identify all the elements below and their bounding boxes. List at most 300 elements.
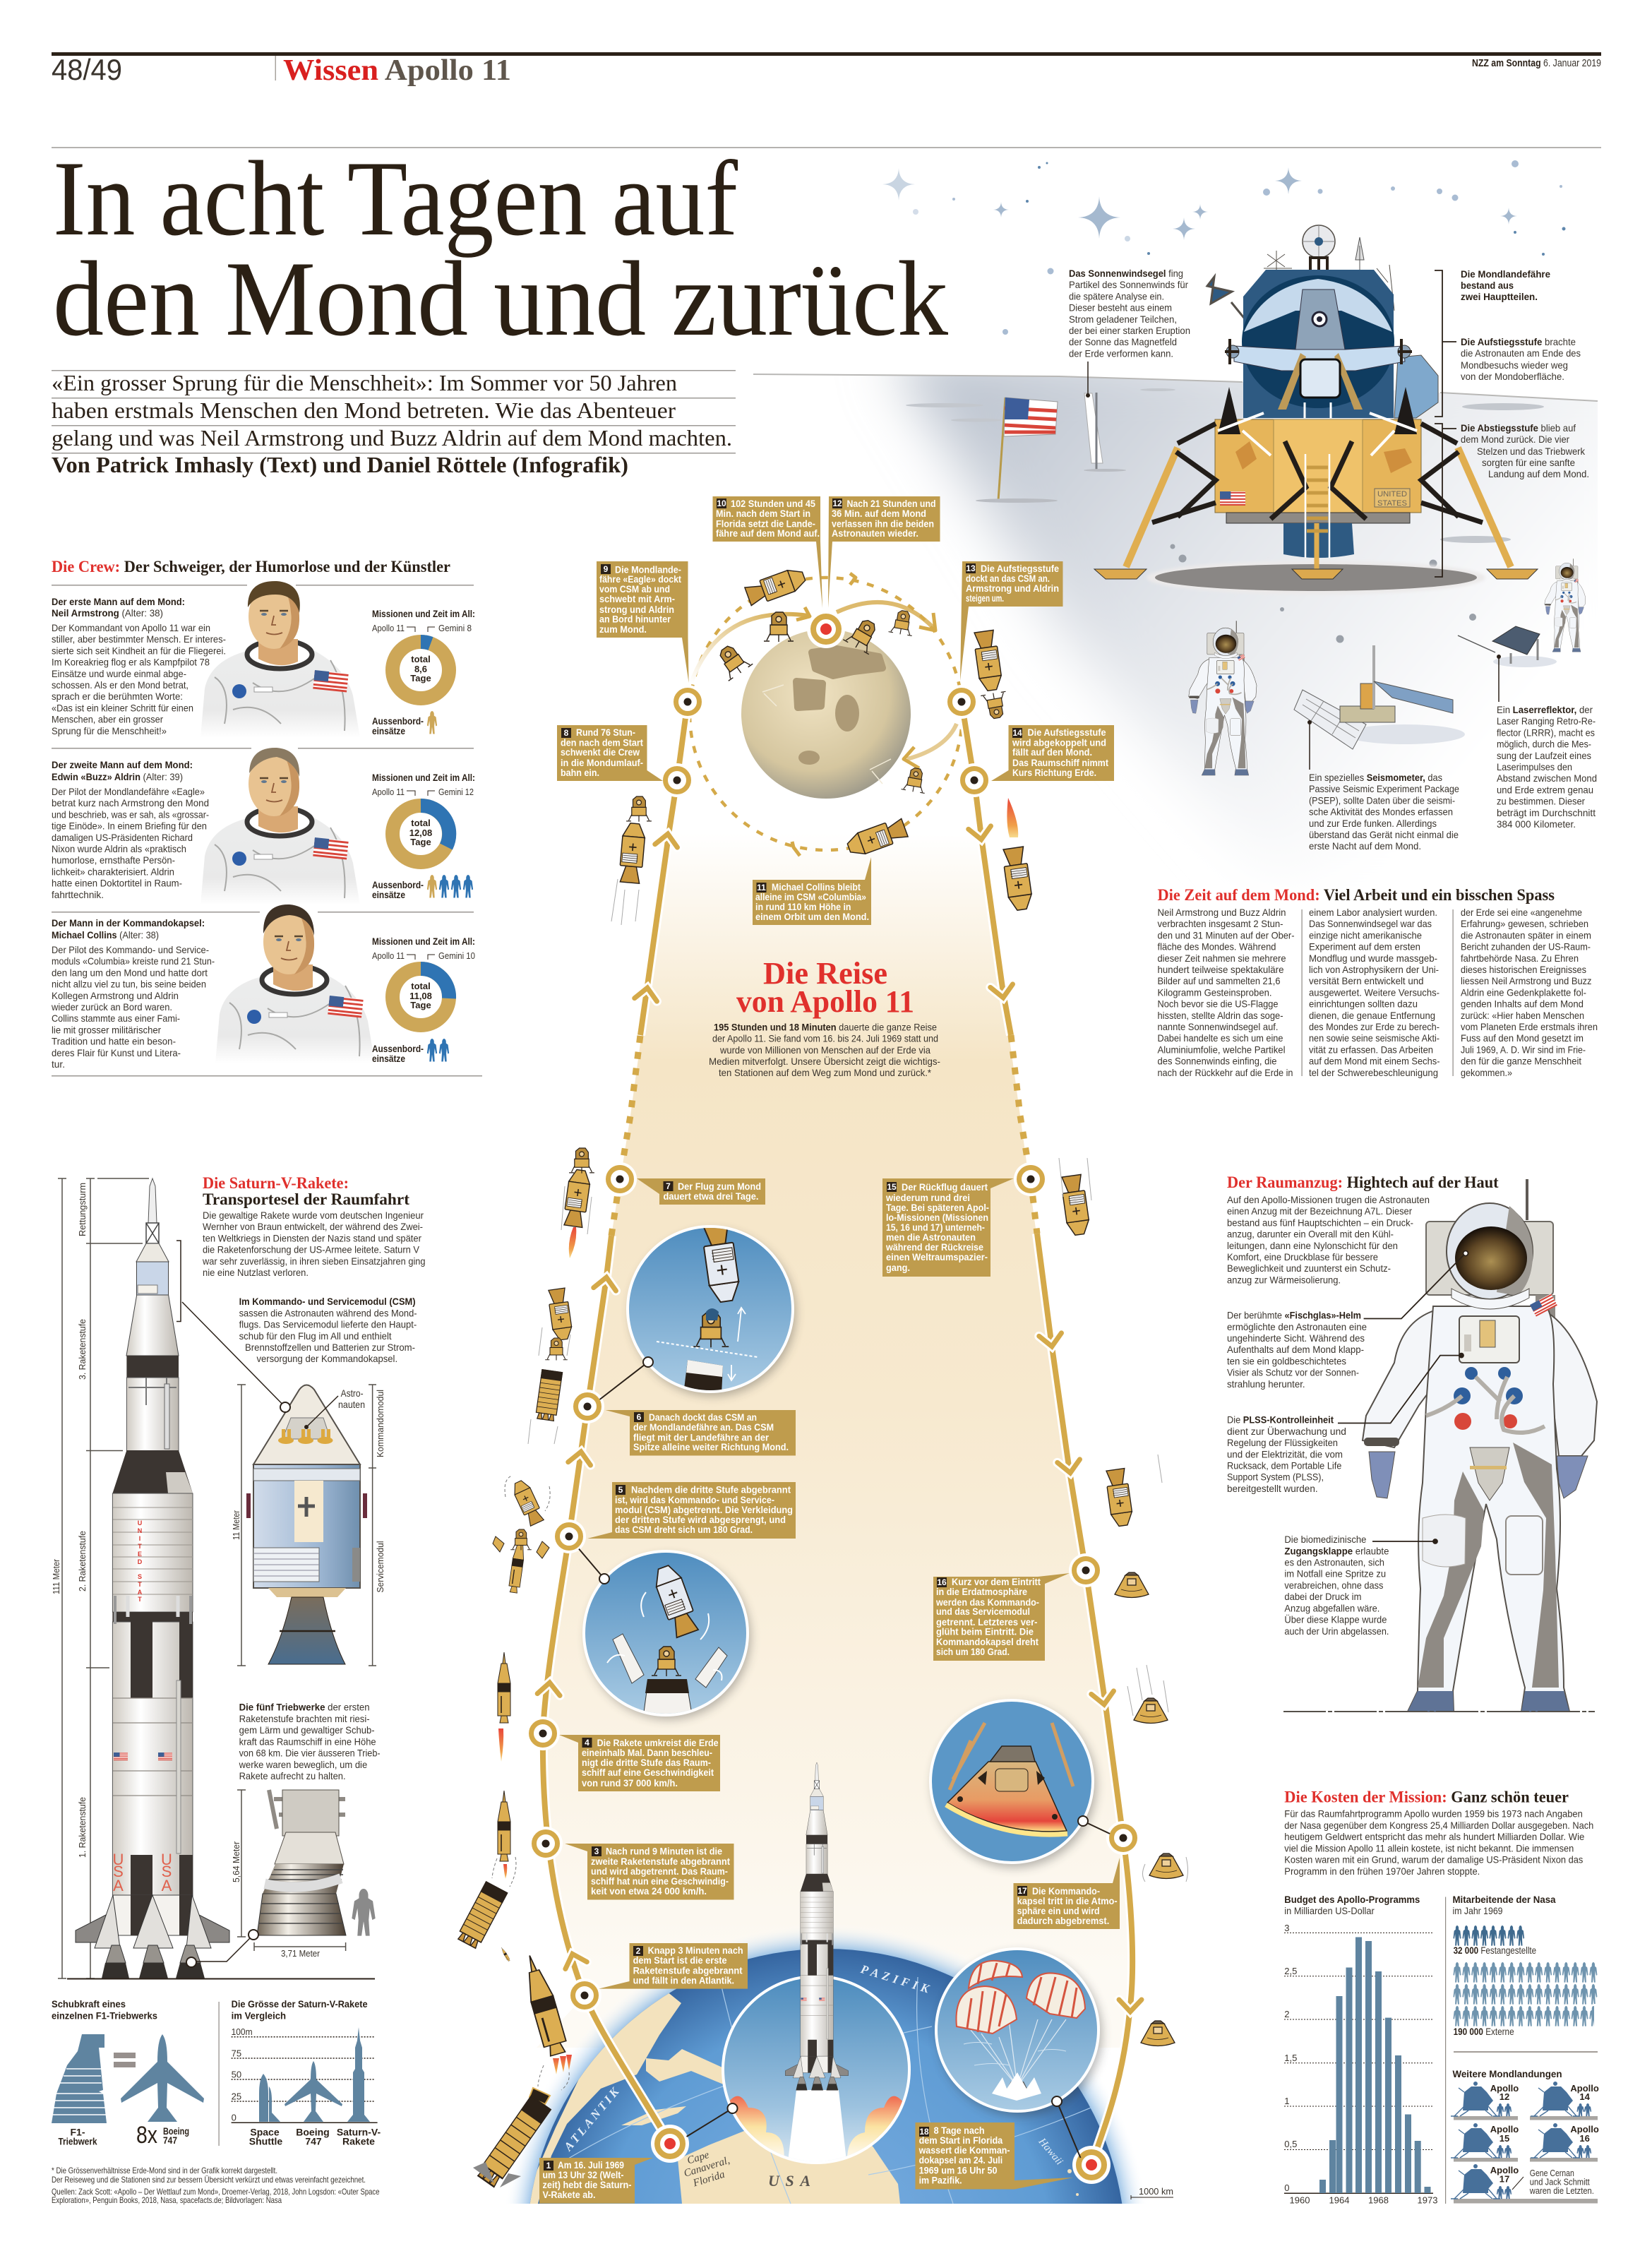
callout 15: einen Weltraumspazier-	[886, 1251, 988, 1262]
CSM labels and dimensions	[231, 1385, 385, 1666]
callout 6: der Mondlandefähre an. Das CSM	[633, 1421, 774, 1433]
text: laser reflector: und Erde extrem genau	[1497, 784, 1593, 795]
text: Collins: deres Flair für Kunst und Litera-	[52, 1047, 181, 1058]
bar chart: budget	[1284, 1894, 1437, 2206]
donut chart: Aldrin: Gemini 12	[438, 787, 474, 797]
text: Collins: lie mit grosser militärischer	[52, 1024, 161, 1035]
Saturn V rocket: D	[138, 1558, 143, 1565]
callout 5	[587, 1482, 796, 1539]
callout 5: das CSM dreht sich um 180 Grad.	[615, 1524, 753, 1535]
earth labels: USA	[768, 2172, 810, 2190]
text: solar wind sail: Partikel des Sonnenwinds für	[1069, 279, 1188, 290]
text: Collins: wieder zurück an Bord waren.	[51, 1001, 172, 1013]
size comparison chart: 0	[232, 2113, 237, 2122]
callout 8: in die Mondumlauf-	[561, 757, 643, 768]
panel: lunar surface scene	[753, 160, 1652, 876]
earth	[504, 1923, 1148, 2204]
moon rocks and craters	[906, 388, 1569, 643]
callout 12	[828, 496, 940, 608]
panel: space suit	[1227, 1174, 1597, 1712]
text: Armstrong: «Das ist ein kleiner Schritt für einen	[52, 702, 193, 713]
donut chart: Collins	[372, 936, 475, 1064]
callout 15: gang.	[886, 1262, 910, 1273]
callout 14: 14	[1012, 728, 1022, 738]
text column 3: dieses historischen Ereignisses	[1461, 964, 1586, 975]
callout 10: 102 Stunden und 45	[731, 498, 815, 509]
bar chart: budget: Budget des Apollo-Programms	[1284, 1894, 1420, 1905]
callout 1: zeit) hebt die Saturn-	[542, 2179, 632, 2190]
callout 15: 15	[887, 1182, 897, 1192]
callout 4: von rund 37 000 km/h.	[582, 1777, 678, 1789]
text: Aldrin: Nixon wurde Aldrin als «praktisch	[52, 843, 186, 854]
bar chart: budget: 3	[1284, 1923, 1290, 1933]
callout 3: 3	[594, 1846, 599, 1856]
text: Aldrin: fahrttechnik.	[52, 889, 104, 900]
rocket dimension lines	[58, 1178, 149, 1978]
callout 3: und wird abgetrennt. Das Raum-	[591, 1865, 728, 1877]
rocket labels: Rettungsturm	[77, 1183, 88, 1236]
portrait: Buzz Aldrin	[200, 748, 360, 905]
thrust comparison: Boeing	[163, 2125, 189, 2137]
text: cost intro	[1284, 1808, 1593, 1877]
text column 1: Noch bevor sie die US-Flagge	[1158, 998, 1279, 1010]
text: Saturn V intro: Wernher von Braun entwickelt, der während des Zwei-	[203, 1221, 423, 1232]
text: CSM: schub für den Flug im All und enthielt	[239, 1330, 392, 1342]
Saturn V rocket: U	[113, 1851, 124, 1868]
text column 1: nach der Rückkehr auf die Erde in	[1158, 1067, 1293, 1078]
thrust comparison: 747	[163, 2134, 177, 2146]
callout 15: während der Rückreise	[885, 1241, 983, 1253]
text: PLSS: Rucksack, dem Portable Life	[1227, 1460, 1342, 1471]
spacecraft on the outbound leg	[456, 1148, 594, 2188]
callout 10: Florida setzt die Lande-	[716, 518, 815, 530]
size comparison chart: im Vergleich	[232, 2010, 286, 2021]
bracket: two main parts	[1435, 270, 1456, 577]
callout 4: 4	[585, 1738, 589, 1748]
text: suit intro: Beweglichkeit und zuunterst ein Schutz-	[1227, 1262, 1391, 1274]
text: helmet: Visier als Schutz vor der Sonnen-	[1227, 1367, 1359, 1378]
further moon landings: und Jack Schmitt	[1530, 2177, 1590, 2187]
callout 1: Am 16. Juli 1969	[558, 2159, 624, 2171]
text column 3: fahrtbehörde Nasa. Zu Ehren	[1461, 953, 1579, 964]
text column 1: dieser Zeit nahmen sie mehrere	[1158, 953, 1286, 964]
flight path: outbound and return	[543, 573, 1132, 2165]
text: Aldrin: hatte einen Doktortitel in Raum-	[52, 877, 182, 888]
further moon landings: Apollo	[1490, 2124, 1519, 2134]
text: cost intro: Programm in den frühen 1970er Jahren stoppte.	[1284, 1865, 1480, 1877]
pictogram: NASA staff: im Jahr 1969	[1453, 1905, 1503, 1916]
callout 16: Kurz vor dem Eintritt	[952, 1576, 1041, 1587]
leader lines	[1338, 1251, 1468, 1544]
intro text: haben erstmals Menschen den Mond betreten. Wie das Abenteuer	[52, 398, 676, 423]
donut chart: Aldrin	[372, 772, 475, 900]
text: Armstrong: Sprung für die Menschheit!»	[52, 725, 167, 736]
rocket labels: 111 Meter	[51, 1558, 61, 1594]
text: Saturn V intro: nie eine Nutzlast verloren.	[203, 1267, 309, 1278]
scene 5: CSM turnaround	[584, 1551, 750, 1723]
callout 8: den nach dem Start	[561, 737, 643, 748]
callout 2: und fällt in den Atlantik.	[633, 1974, 734, 1986]
donut chart: Armstrong	[372, 608, 475, 736]
text column 3: der Erde sei eine «angenehme	[1461, 907, 1582, 918]
text: Collins: Kollegen Armstrong und Aldrin	[52, 990, 179, 1001]
scene 18: splashdown	[936, 1949, 1102, 2116]
thrust comparison: Schubkraft eines	[52, 1998, 126, 2010]
text column 1: Bilder auf und sammelten 21,6	[1158, 975, 1281, 986]
Saturn V rocket: A	[138, 1589, 143, 1596]
text: CSM: Im Kommando- und Servicemodul (CSM)	[239, 1296, 416, 1307]
Saturn V rocket: I	[139, 1535, 140, 1542]
moon orbit: dashed circle	[690, 578, 962, 850]
callout 4: schiff auf eine Geschwindigkeit	[582, 1767, 714, 1778]
callout 11: Michael Collins bleibt	[772, 881, 861, 892]
callout 7: 7	[666, 1181, 671, 1191]
donut chart: Collins: Gemini 10	[438, 950, 475, 961]
callout 17: Die Kommando-	[1032, 1885, 1100, 1897]
text: Armstrong: Neil Armstrong (Alter: 38)	[52, 607, 163, 619]
callout 18: dokapsel am 24. Juli	[919, 2154, 1002, 2166]
text: suit intro: bestand aus fünf Hauptschichten – ein Druck-	[1227, 1217, 1413, 1229]
callout 15: Der Rückflug dauert	[902, 1181, 988, 1193]
donut chart: Aldrin: einsätze	[372, 889, 405, 900]
callout 16: 16	[937, 1577, 947, 1587]
text: lunar module parts: zwei Hauptteilen.	[1461, 291, 1538, 302]
callout 16: sich um 180 Grad.	[936, 1646, 1010, 1657]
size comparison chart: 100m	[232, 2026, 253, 2037]
donut chart: Aldrin: total	[411, 818, 431, 828]
text: lunar module parts: Landung auf dem Mond.	[1488, 468, 1589, 479]
bar chart: budget: in Milliarden US-Dollar	[1284, 1905, 1375, 1916]
text: Saturn V intro: Die gewaltige Rakete wurde vom deutschen Ingenieur	[203, 1210, 424, 1221]
CSM labels and dimensions: Kommandomodul	[375, 1390, 385, 1457]
CSM labels and dimensions: Astro-	[341, 1387, 364, 1399]
text: F1 engines: Raketenstufe brachten mit riesi-	[239, 1713, 370, 1724]
text: seismometer: sche Aktivität des Mondes erfassen	[1309, 806, 1453, 818]
journey background	[537, 830, 1130, 2048]
spacecraft on the return leg	[1059, 1158, 1187, 2046]
text: cost intro: Für das Raumfahrtprogramm Apollo wurden 1959 bis 1973 nach Angaben	[1284, 1808, 1583, 1820]
text column 3: den für die ganze Menschheit	[1461, 1055, 1581, 1066]
journey title: Die Reise	[763, 956, 887, 991]
pictogram: NASA staff: Mitarbeitende der Nasa	[1453, 1894, 1556, 1905]
CSM labels and dimensions: Servicemodul	[375, 1541, 385, 1593]
callout 9: Die Mondlande-	[615, 563, 681, 575]
donut chart: Collins: 11,08	[409, 991, 432, 1001]
text: laser reflector: Laser Ranging Retro-Re-	[1497, 715, 1596, 727]
Saturn V rocket: U	[161, 1851, 172, 1868]
callout 3: Nach rund 9 Minuten ist die	[606, 1846, 722, 1857]
earth labels: Florida	[691, 2169, 726, 2190]
intro text	[52, 370, 736, 477]
journey intro: wurde von Millionen von Menschen auf der Erde via	[719, 1044, 930, 1056]
text column 2: Experiment auf dem ersten	[1309, 941, 1420, 952]
text: Aldrin	[52, 759, 209, 900]
thrust comparison: Triebwerk	[58, 2135, 97, 2146]
connector pins	[579, 1357, 1110, 2158]
callout 4	[559, 1735, 720, 1791]
callout 14	[991, 725, 1114, 781]
text: Armstrong: sprach er die berühmten Worte:	[52, 691, 183, 702]
text: Collins: den lang um den Mond und hatte dort	[52, 967, 208, 979]
callout 11: in rund 110 km Höhe in	[755, 901, 851, 912]
donut chart: Aldrin: 12,08	[409, 828, 432, 838]
pictogram: NASA staff: 190 000 Externe	[1454, 2026, 1514, 2037]
text column 2: einrichtungen sollten dazu	[1309, 998, 1418, 1010]
panel: crew	[51, 558, 482, 1076]
text: F1 engines: kraft das Raumschiff in eine Höhe	[239, 1736, 376, 1747]
thrust comparison: einzelnen F1-Triebwerks	[52, 2010, 157, 2021]
text: Collins: Der Mann in der Kommandokapsel:	[52, 917, 205, 929]
lunar module	[1094, 225, 1538, 595]
footnote and sources: Der Reiseweg und die Stationen sind zur bessern Übersicht verkürzt und etwas vereinfacht gezeichnet.	[52, 2175, 366, 2185]
text: Armstrong: Der Kommandant von Apollo 11 war ein	[52, 622, 210, 633]
size comparison chart: Saturn-V-	[337, 2127, 381, 2138]
callout 6	[606, 1410, 796, 1456]
text: PLSS: und der Elektrizität, die vom	[1227, 1449, 1343, 1460]
text column 2: dienen, die genaue Entfernung	[1309, 1010, 1435, 1021]
size comparison chart: 75	[232, 2048, 241, 2059]
text: helmet: Aufenthalts auf dem Mond klapp-	[1227, 1344, 1364, 1355]
text column 2: einzige nicht amerikanische	[1309, 929, 1422, 941]
text: biomedical access flap: dabei der Druck im	[1284, 1591, 1361, 1602]
space suit illustration	[1363, 1179, 1597, 1712]
text: lunar module parts: Mondbesuchs wieder weg	[1461, 359, 1568, 371]
text column 1: den und 31 Minuten auf der Ober-	[1158, 929, 1295, 941]
CSM cutaway	[249, 1385, 365, 1664]
text column 1: hissten, stellte Aldrin das soge-	[1158, 1010, 1283, 1021]
text: Collins: moduls «Columbia» kreiste rund 21 Stun-	[52, 955, 215, 967]
direction chevrons	[537, 826, 1142, 2012]
text: Armstrong: schossen. Als er den Mond betrat,	[52, 679, 188, 691]
Saturn V rocket: T	[138, 1581, 142, 1588]
text column 2: lich von Astrophysikern der Uni-	[1309, 964, 1439, 975]
text: suit intro: leitungen, dann eine Nylonschicht für den	[1227, 1240, 1398, 1251]
size comparison chart: Die Grösse der Saturn-V-Rakete	[232, 1998, 368, 2010]
text: Armstrong: Der erste Mann auf dem Mond:	[52, 596, 185, 607]
Saturn V rocket	[76, 1178, 229, 1978]
callout 14: wird abgekoppelt und	[1012, 737, 1106, 748]
text column 3: Juli 1969, A. D. Wir sind im Frie-	[1461, 1044, 1586, 1055]
text: Collins: Tradition und hatte ein beson-	[52, 1035, 176, 1046]
text: suit intro: Komfort, eine Druckblase für bessere	[1227, 1251, 1378, 1262]
text: laser reflector: möglich, durch die Mes-	[1497, 739, 1591, 750]
F1 engine detail	[67, 1790, 376, 1980]
text column 1: Neil Armstrong und Buzz Aldrin	[1158, 907, 1286, 918]
text: solar wind sail: Dieser besteht aus einem	[1069, 302, 1172, 314]
text: cost intro: heutigem Geldwert entspricht das mehr als hundert Milliarden Dollar. Wie	[1284, 1831, 1584, 1842]
earth labels	[561, 1962, 1065, 2191]
text: biomedical access flap: verabreichen, ohne dass	[1284, 1580, 1383, 1591]
donut chart: Collins: Aussenbord-	[372, 1043, 424, 1054]
callout 2: Knapp 3 Minuten nach	[648, 1945, 743, 1956]
callout 5: modul (CSM) abgetrennt. Die Verkleidung	[615, 1504, 793, 1515]
callout 6: 6	[637, 1412, 642, 1422]
callout 8: 8	[564, 728, 569, 738]
text column 3: Aldrin eine Gedenkplakette fol-	[1461, 987, 1586, 998]
text: lunar module parts: Die Mondlandefähre	[1461, 268, 1550, 280]
Saturn V rocket: N	[138, 1527, 142, 1534]
donut chart: Aldrin: Missionen und Zeit im All:	[372, 772, 475, 783]
bar chart: budget: 1960	[1290, 2195, 1310, 2206]
text: biomedical access flap: auch der Urin abgelassen.	[1284, 1625, 1389, 1637]
text: PLSS: bereitgestellt wurden.	[1227, 1483, 1318, 1494]
Saturn V rocket: S	[162, 1863, 172, 1880]
stars	[882, 160, 1566, 335]
callout 8: schwenkt die Crew	[561, 746, 640, 758]
bar chart: budget: 1968	[1368, 2195, 1389, 2206]
callout 7: dauert etwa drei Tage.	[664, 1190, 758, 1202]
text: solar wind sail	[1069, 268, 1190, 359]
donut chart: Collins: Missionen und Zeit im All:	[372, 936, 475, 947]
callout 1: V-Rakete ab.	[542, 2189, 596, 2200]
callout 6: Spitze alleine weiter Richtung Mond.	[633, 1441, 789, 1452]
heading: Saturn V: Transportesel der Raumfahrt	[203, 1190, 409, 1208]
text: solar wind sail: Das Sonnenwindsegel fing	[1069, 268, 1183, 279]
rocket labels: 2. Raketenstufe	[77, 1531, 88, 1592]
footnote and sources: * Die Grössenverhältnisse Erde-Mond sind in der Grafik korrekt dargestellt.	[52, 2166, 277, 2175]
intro text: «Ein grosser Sprung für die Menschheit»: Im Sommer vor 50 Jahren	[52, 370, 677, 395]
title	[53, 139, 948, 358]
text column 3: gekommen.»	[1461, 1067, 1512, 1078]
text: seismometer: (PSEP), sollte Daten über die seismi-	[1309, 795, 1455, 806]
page header	[52, 52, 1601, 148]
text column 2: Mondflug und wurde massgeb-	[1309, 953, 1437, 964]
suit ground line	[1283, 1711, 1595, 1712]
text: helmet: strahlung herunter.	[1227, 1378, 1305, 1390]
astronaut front	[1189, 621, 1257, 775]
donut chart: Collins: einsätze	[372, 1053, 405, 1064]
heading: Zeit auf dem Mond: Die Zeit auf dem Mond: Viel Arbeit und ein bisschen Spass	[1158, 886, 1555, 904]
text: Armstrong	[52, 596, 226, 736]
callout 1	[539, 2158, 653, 2204]
text: Aldrin: und beschrieb, was er sah, als «grossar-	[52, 809, 209, 820]
callout 18: wassert die Komman-	[918, 2144, 1010, 2156]
callout 17: 17	[1017, 1886, 1027, 1896]
donut chart: Armstrong: Aussenbord-	[372, 715, 424, 727]
callout 13: steigen um.	[966, 592, 1004, 604]
text column 3	[1461, 907, 1598, 1078]
text: biomedical access flap: Zugangsklappe erlaubte	[1284, 1545, 1389, 1556]
laser callout line	[1497, 655, 1501, 702]
F1 engine detail: 5,64 Meter	[231, 1841, 241, 1882]
text column 1: Aluminiumfolie, welche Partikel	[1158, 1044, 1285, 1055]
heading: Kosten: Die Kosten der Mission: Ganz schön teuer	[1284, 1789, 1569, 1806]
callout 12: 12	[832, 498, 842, 508]
text: lunar module parts: Stelzen und das Triebwerk	[1477, 446, 1586, 457]
text column 3: Erfahrung» gewesen, schrieben	[1461, 918, 1588, 929]
text: Collins: Collins stammte aus einer Fami-	[52, 1013, 180, 1024]
callout 9: zum Mond.	[599, 623, 647, 635]
solar wind sail	[1084, 362, 1126, 472]
text: suit intro: anzug zur Wärmeisolierung.	[1227, 1274, 1341, 1285]
text column 2: des Mondes zur Erde zu berech-	[1309, 1021, 1439, 1032]
pictogram: NASA staff	[1453, 1894, 1600, 2053]
bar chart: budget: 1973	[1418, 2195, 1437, 2206]
text: lunar module parts	[1461, 268, 1589, 479]
CSM labels and dimensions: 11 Meter	[231, 1510, 241, 1540]
text column 3: liessen Neil Armstrong und Buzz	[1461, 975, 1591, 986]
page header: 48/49	[52, 53, 122, 86]
callout 9: strong und Aldrin	[599, 604, 674, 615]
footnote and sources: Exploration», Penguin Books, 2018, Nasa, spacefacts.de; Bildvorlagen: Nasa	[52, 2195, 282, 2205]
title: In acht Tagen auf	[53, 139, 738, 258]
text: Aldrin: tige Einöde». In einem Briefing für den	[52, 820, 207, 832]
callout 10: Min. nach dem Start in	[716, 508, 810, 519]
astronaut small	[1545, 559, 1586, 652]
callout 13: dockt an das CSM an.	[966, 573, 1050, 584]
flag	[976, 398, 1058, 503]
text column 3: Bericht zuhanden der US-Raum-	[1461, 941, 1591, 952]
bar chart: budget: 0,5	[1284, 2139, 1297, 2149]
footnote and sources	[52, 2166, 380, 2205]
callout 17: sphäre ein und wird	[1017, 1905, 1100, 1916]
callout 10: 10	[717, 498, 726, 508]
panel: journey of Apollo 11	[456, 496, 1187, 2204]
callout 9: fähre «Eagle» dockt	[599, 573, 681, 585]
text: laser reflector: Abstand zwischen Mond	[1497, 772, 1597, 784]
heading: Saturn V: Die Saturn-V-Rakete:	[203, 1174, 349, 1192]
donut chart: Aldrin: Aussenbord-	[372, 879, 424, 890]
text column 2: nen sowie seine seismische Akti-	[1309, 1032, 1439, 1044]
donut chart: Collins: total	[411, 981, 431, 991]
text column 2: Das Sonnenwindsegel war das	[1309, 918, 1432, 929]
callout 2: dem Start ist die erste	[633, 1954, 727, 1966]
further moon landings: Gene Cernan	[1530, 2168, 1574, 2178]
rocket labels: 1. Raketenstufe	[77, 1797, 88, 1858]
text: seismometer: Ein spezielles Seismometer, das	[1309, 772, 1442, 783]
text: Collins: nicht allzu viel zu tun, bis seine beiden	[52, 979, 206, 990]
CSM bracket and leader	[176, 1241, 282, 1404]
text: biomedical access flap: es den Astronauten, sich	[1284, 1556, 1384, 1568]
text: F1 engines: Rakete aufrecht zu halten.	[239, 1770, 346, 1781]
callout 5: 5	[618, 1485, 623, 1495]
further moon landings: Apollo	[1490, 2083, 1519, 2094]
text: biomedical access flap	[1284, 1534, 1389, 1637]
text: Saturn V intro: war sehr zuverlässig, in ihren sieben Einsatzjahren ging	[202, 1255, 425, 1267]
text: Saturn V intro: ten Weltkriegs in Diensten der Nazis stand und später	[203, 1233, 421, 1244]
callout 14: Das Raumschiff nimmt	[1012, 757, 1108, 768]
page header: Wissen Apollo 11	[283, 54, 511, 87]
scale bar 1000 km: 1000 km	[1139, 2186, 1173, 2197]
callout 16: und das Servicemodul	[936, 1606, 1030, 1617]
donut chart: Armstrong: Apollo 11	[372, 623, 405, 633]
callout 3	[565, 1844, 734, 1899]
text: F1 engines: von 68 km. Die vier äusseren Trieb-	[239, 1747, 381, 1758]
donut chart: Armstrong: 8,6	[414, 664, 427, 674]
callout 3: zweite Raketenstufe abgebrannt	[591, 1856, 730, 1867]
laser reflector	[1458, 626, 1557, 667]
text: lunar module parts: sorgten für eine sanfte	[1482, 457, 1575, 468]
text: helmet: ungehinderte Sicht. Während des	[1227, 1332, 1365, 1344]
text: Collins	[51, 917, 215, 1070]
text: seismometer: und zur Erde funken. Allerdings	[1309, 818, 1437, 829]
text: lunar module parts: bestand aus	[1461, 280, 1514, 291]
size comparison chart: 25	[232, 2091, 241, 2101]
text column 2: auf dem Mond mit einem Sechs-	[1309, 1055, 1440, 1066]
text: lunar module parts: Die Aufstiegsstufe brachte	[1461, 336, 1576, 347]
callouts	[539, 496, 1120, 2204]
text: Saturn V intro	[202, 1210, 425, 1278]
moon	[741, 629, 911, 799]
text: solar wind sail: Strom geladener Teilchen,	[1069, 314, 1177, 325]
callout 14: fällt auf den Mond.	[1012, 746, 1092, 758]
thrust comparison: 8x	[136, 2122, 157, 2149]
text column 3: Fuss auf den Mond gesetzt im	[1461, 1032, 1584, 1044]
donut chart: Aldrin: Apollo 11	[372, 787, 405, 797]
text column 2: vität zu erfassen. Das Arbeiten	[1309, 1044, 1433, 1055]
panel: Saturn V	[51, 1174, 425, 2205]
text: Armstrong: Im Koreakrieg flog er als Kampfpilot 78	[52, 657, 210, 668]
